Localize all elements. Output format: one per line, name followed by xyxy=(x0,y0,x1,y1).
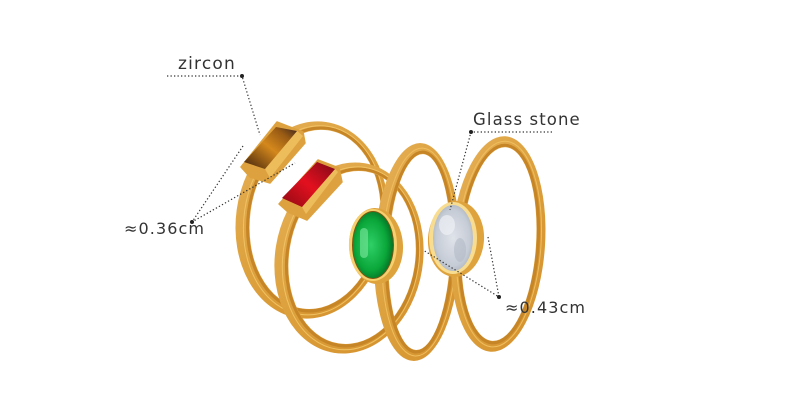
brown zircon stone in setting xyxy=(241,122,305,183)
callout: 0.43cm width: ≈0.43cm xyxy=(505,298,586,317)
green oval stone in setting xyxy=(347,207,405,285)
callout: zircon xyxy=(167,54,260,135)
callout: 0.36cm width xyxy=(124,146,295,238)
callout: 0.36cm width: ≈0.36cm xyxy=(124,219,205,238)
red zircon stone in setting xyxy=(279,160,342,220)
ring 2: red zircon ring band xyxy=(261,152,437,364)
callout: glass stone: Glass stone xyxy=(473,110,581,129)
callout: zircon: zircon xyxy=(178,54,236,74)
ring 4: glass stone ring band xyxy=(444,133,552,355)
ring 1: brown zircon ring band xyxy=(223,111,401,329)
callout: 0.43cm width xyxy=(423,237,586,317)
callout: glass stone xyxy=(450,110,581,210)
glass oval stone in setting xyxy=(425,199,487,279)
ring 3: green stone ring band xyxy=(370,142,464,362)
